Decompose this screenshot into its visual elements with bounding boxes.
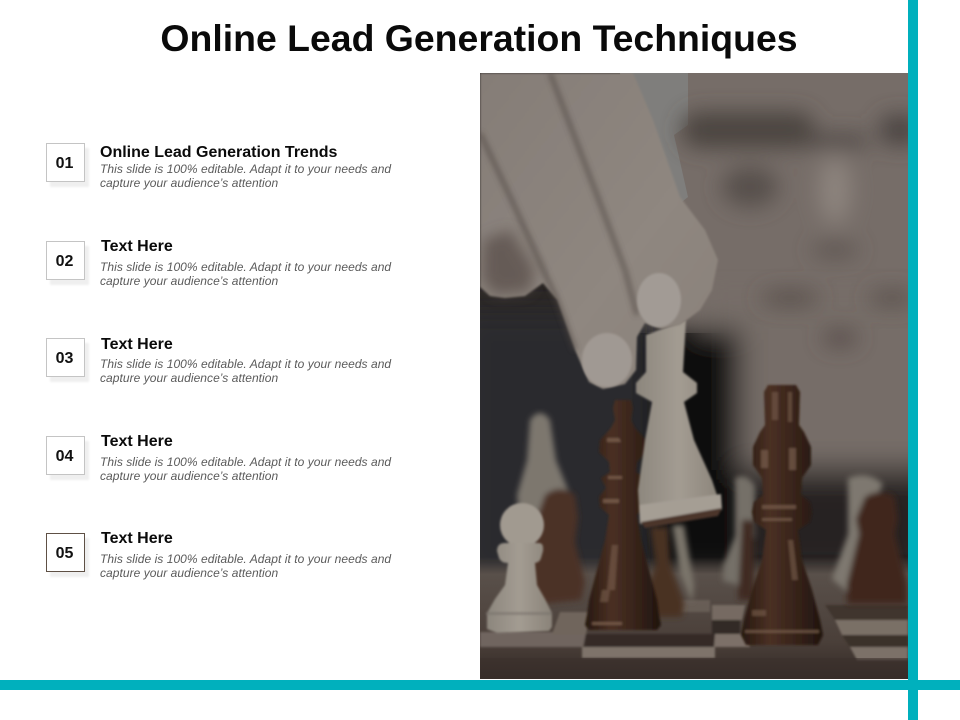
number box 05: 05 (56, 545, 73, 562)
description 05 (100, 552, 392, 580)
description 04: capture your audience’s attention (100, 469, 278, 483)
description 04: This slide is 100% editable. Adapt it to your needs and (100, 455, 391, 469)
description 01: This slide is 100% editable. Adapt it to your needs and (100, 162, 391, 176)
number box 01: 01 (56, 155, 73, 172)
heading 04: Text Here (101, 433, 173, 450)
list item 01 (46, 143, 392, 190)
photo backdrop (460, 73, 960, 679)
heading 01: Online Lead Generation Trends (100, 144, 337, 161)
chess board (480, 557, 908, 679)
description 05: This slide is 100% editable. Adapt it to your needs and (100, 552, 391, 566)
fingernail (582, 333, 632, 387)
white pawn chess piece (486, 503, 552, 633)
description 03: This slide is 100% editable. Adapt it to your needs and (100, 357, 391, 371)
number box 03: 03 (56, 350, 73, 367)
number box 02: 02 (56, 253, 73, 270)
number box 02 (46, 241, 85, 280)
description 02: This slide is 100% editable. Adapt it to your needs and (100, 260, 391, 274)
dark king chess piece (741, 385, 823, 645)
number box 05 (46, 533, 85, 572)
description 03 (100, 357, 392, 385)
description 02 (100, 260, 392, 288)
list item 05 (46, 530, 392, 580)
blurred face with glasses (682, 112, 920, 346)
number box 03 (46, 338, 85, 377)
list item 03 (46, 336, 392, 385)
description 01 (100, 162, 392, 190)
title: Online Lead Generation Techniques (160, 17, 798, 59)
number box 04 (46, 436, 85, 475)
finger crease (480, 133, 575, 350)
finger crease (550, 73, 637, 315)
description 04 (100, 455, 392, 483)
heading 05: Text Here (101, 530, 173, 547)
teal horizontal bar (0, 680, 960, 690)
knuckle shadow under rear finger (482, 230, 535, 295)
number box 01 (46, 143, 85, 182)
heading 03: Text Here (101, 336, 173, 353)
number box 04: 04 (56, 448, 73, 465)
description 01: capture your audience’s attention (100, 176, 278, 190)
white chess piece held by fingers (636, 320, 722, 528)
photo: hand moving a chess piece (480, 73, 908, 679)
teal vertical bar (908, 0, 918, 720)
hand with two fingers (480, 73, 718, 389)
dark queen chess piece (585, 400, 661, 630)
description 02: capture your audience’s attention (100, 274, 278, 288)
list item 04 (46, 433, 392, 483)
description 05: capture your audience’s attention (100, 566, 278, 580)
heading 02: Text Here (101, 238, 173, 255)
list item 02 (46, 238, 392, 288)
fingernail (637, 273, 681, 327)
blurred background chess pieces (517, 413, 907, 617)
description 03: capture your audience’s attention (100, 371, 278, 385)
